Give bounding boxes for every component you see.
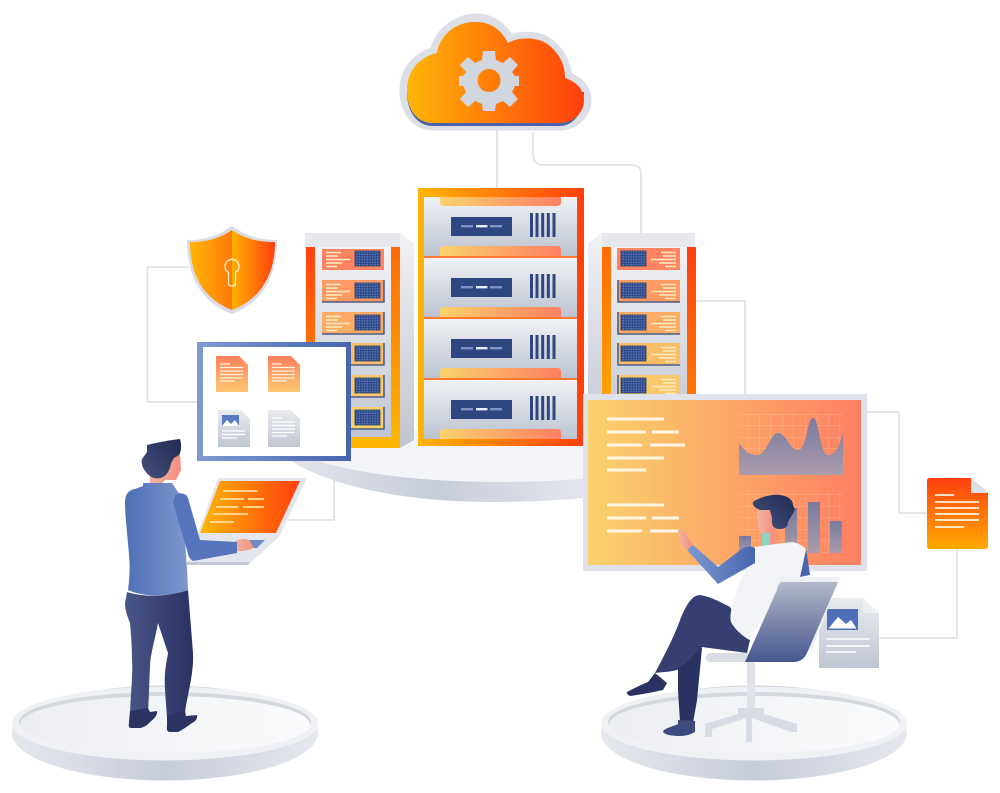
front shoe — [167, 711, 197, 732]
hand — [678, 530, 693, 550]
right floor platform — [601, 686, 907, 780]
orange document icon — [927, 478, 988, 549]
rack item rows — [617, 248, 680, 397]
back shoe — [663, 720, 695, 736]
chair back edge — [745, 577, 840, 662]
image document — [218, 410, 250, 447]
front leg — [655, 595, 750, 673]
connector lines — [148, 130, 957, 638]
image document icon — [819, 598, 879, 668]
left server rack — [305, 233, 414, 448]
orange document 2 — [268, 356, 300, 392]
chair back — [745, 582, 838, 662]
far arm — [800, 548, 810, 577]
center server rack — [418, 188, 584, 446]
orange document 1 — [216, 356, 248, 392]
hand — [235, 539, 254, 551]
server unit 2 — [424, 258, 577, 317]
torso — [125, 483, 188, 595]
trousers — [125, 590, 193, 718]
center platform — [272, 430, 600, 502]
server unit 3 — [424, 319, 577, 378]
laptop code lines — [210, 491, 264, 522]
left floor platform — [12, 686, 318, 780]
keyhole — [225, 259, 239, 286]
rack item rows — [322, 249, 384, 429]
screen text lines — [607, 419, 685, 531]
area chart — [739, 414, 843, 475]
grey document — [268, 410, 300, 447]
shield icon — [187, 226, 277, 314]
chair base — [705, 660, 797, 742]
neck and face — [150, 453, 181, 486]
arm — [173, 493, 237, 561]
bar chart — [739, 492, 843, 553]
hair — [142, 439, 181, 478]
cloud icon — [406, 20, 585, 126]
back leg — [678, 646, 702, 723]
large dashboard screen — [583, 394, 867, 571]
seated person and chair — [627, 495, 840, 742]
back shoe — [129, 708, 157, 728]
laptop — [187, 478, 307, 565]
neck and face — [757, 507, 775, 545]
chair seat — [706, 653, 748, 662]
white torso — [730, 542, 806, 640]
near arm — [687, 545, 755, 584]
gear — [459, 51, 519, 111]
server unit 4 — [424, 380, 577, 439]
right server rack — [588, 233, 696, 448]
hair — [753, 495, 795, 529]
file browser window — [197, 342, 351, 461]
collar — [762, 533, 770, 546]
server unit 1 — [424, 197, 577, 256]
left person — [125, 439, 254, 732]
front shoe — [627, 673, 667, 696]
